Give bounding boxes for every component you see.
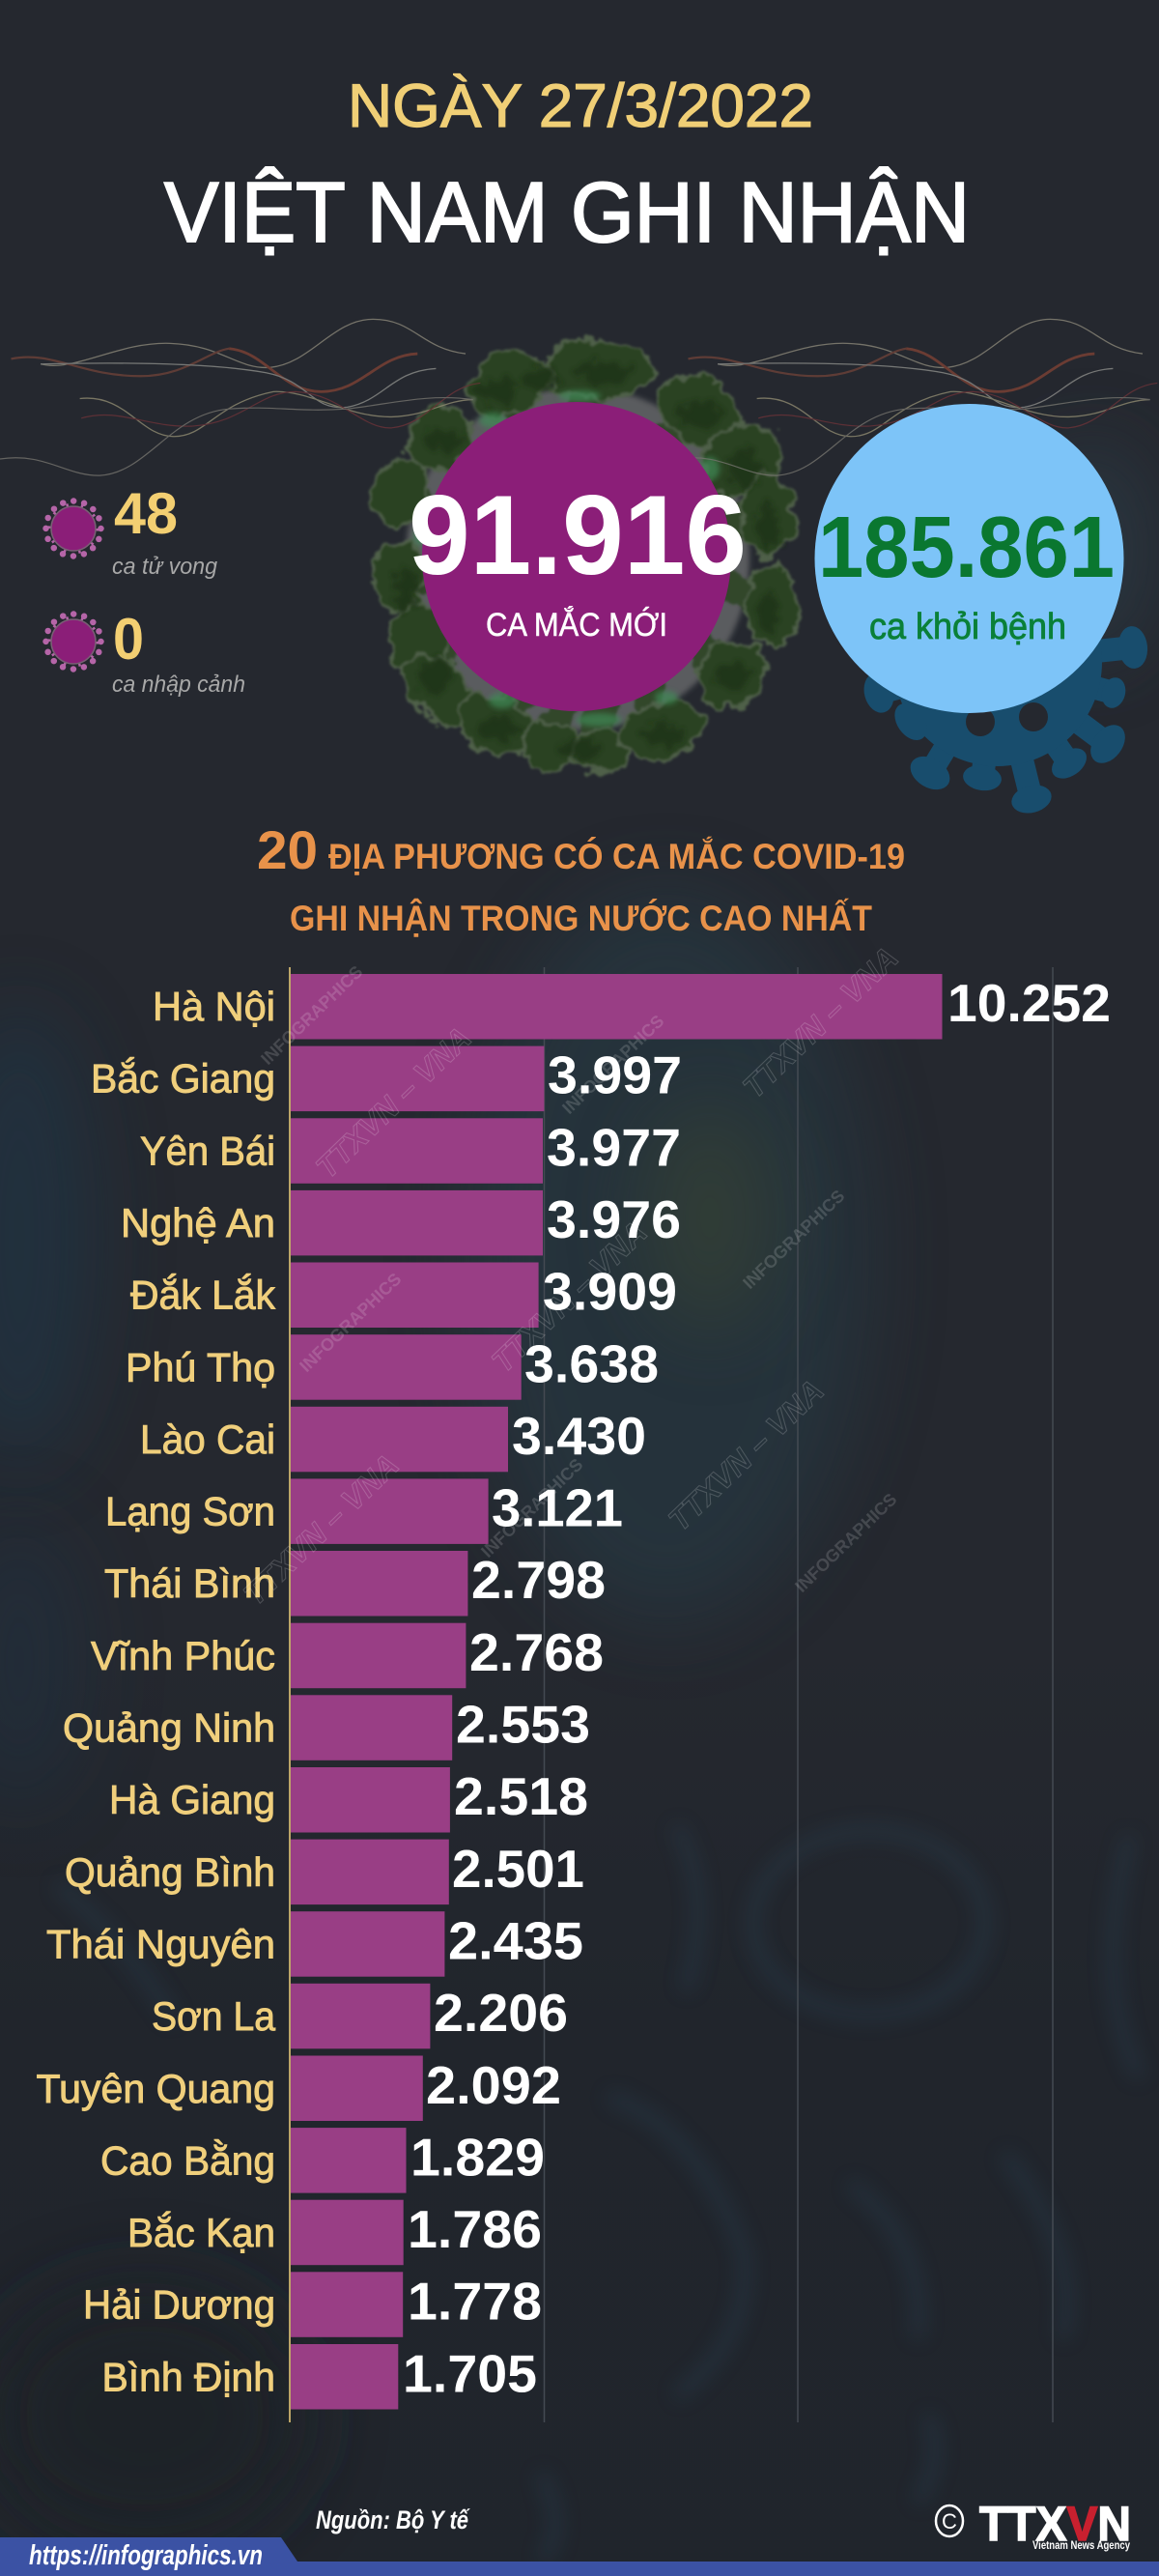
chart heading: [257, 819, 905, 938]
row: Bắc Kạn: 1.786: [408, 2199, 542, 2259]
icon: small virus: [46, 615, 100, 669]
row: Hải Dương: 1.778: [408, 2272, 542, 2332]
title: date: NGÀY 27/3/2022: [348, 72, 813, 140]
row: Lạng Sơn: 3.121: [492, 1478, 623, 1538]
row: Quảng Ninh: 2.553: [456, 1695, 590, 1755]
watermarks: TTXVN – VNA: [237, 1447, 406, 1612]
row: Yên Bái: Yên Bái: [140, 1128, 275, 1173]
row: Quảng Bình: 2.501: [452, 1839, 584, 1899]
row: Nghệ An: 3.976: [547, 1189, 681, 1249]
row: Lào Cai: Lào Cai: [140, 1417, 275, 1462]
watermarks: INFOGRAPHICS: [296, 1270, 405, 1376]
circle: new cases: 91.916: [409, 472, 747, 598]
chart heading: ĐỊA PHƯƠNG CÓ CA MẮC COVID-19: [328, 836, 905, 876]
decorative waves left: [0, 319, 480, 475]
row: Hải Dương: Hải Dương: [83, 2282, 275, 2328]
row: Thái Nguyên: 2.435: [448, 1911, 583, 1971]
row: Hà Nội: 10.252: [947, 973, 1111, 1033]
row: Nghệ An: [121, 1189, 681, 1255]
row: Bình Định: [102, 2343, 537, 2410]
watermarks: [237, 940, 905, 1612]
row: Phú Thọ: [126, 1333, 659, 1400]
row: Đắk Lắk: Đắk Lắk: [130, 1273, 276, 1318]
row: Cao Bằng: 1.829: [410, 2127, 545, 2187]
stat: imported cases: 0: [113, 607, 144, 672]
row: Tuyên Quang: [37, 2055, 561, 2121]
decorative waves right: [677, 319, 1157, 475]
row: Vĩnh Phúc: 2.768: [469, 1622, 604, 1682]
row: Quảng Ninh: [63, 1695, 590, 1760]
row: Lạng Sơn: Lạng Sơn: [105, 1489, 275, 1534]
icon: small virus: [46, 501, 100, 557]
row: Bắc Giang: Bắc Giang: [91, 1056, 275, 1102]
row: Yên Bái: 3.977: [547, 1117, 681, 1177]
row: Tuyên Quang: Tuyên Quang: [37, 2066, 275, 2111]
stat: deaths: 48: [114, 481, 178, 546]
row: Lào Cai: [140, 1406, 646, 1472]
watermarks: INFOGRAPHICS: [739, 1187, 848, 1293]
row: Phú Thọ: Phú Thọ: [126, 1344, 275, 1389]
row: Hà Giang: [109, 1766, 588, 1832]
row: Nghệ An: Nghệ An: [121, 1200, 275, 1245]
row: Bắc Kạn: Bắc Kạn: [127, 2210, 275, 2255]
row: Hải Dương: [83, 2272, 542, 2337]
watermarks: INFOGRAPHICS: [477, 1455, 586, 1561]
row: Thái Bình: Thái Bình: [104, 1560, 275, 1606]
stat: imported cases: [46, 607, 245, 698]
logo: TTXVN: Vietnam News Agency: [1032, 2538, 1130, 2552]
footer band: [0, 2537, 1159, 2576]
watermarks: TTXVN – VNA: [736, 940, 905, 1104]
watermarks: TTXVN – VNA: [309, 1020, 478, 1185]
row: Thái Bình: 2.798: [471, 1550, 606, 1610]
source: Nguồn: Bộ Y tế: [316, 2505, 470, 2534]
watermarks: INFOGRAPHICS: [257, 962, 366, 1069]
row: Vĩnh Phúc: [91, 1622, 604, 1688]
blue virus icon: [860, 558, 1149, 817]
row: Đắk Lắk: [130, 1262, 677, 1328]
row: Quảng Bình: Quảng Bình: [65, 1849, 275, 1895]
row: Bình Định: Bình Định: [102, 2354, 275, 2399]
row: Cao Bằng: [100, 2127, 545, 2193]
watermarks: TTXVN – VNA: [662, 1373, 831, 1537]
row: Thái Nguyên: Thái Nguyên: [46, 1921, 275, 1967]
row: Lào Cai: 3.430: [512, 1406, 646, 1466]
row: Thái Bình: [104, 1550, 606, 1616]
row: Bắc Giang: [91, 1045, 682, 1111]
row: Hà Giang: 2.518: [454, 1766, 588, 1826]
row: Quảng Bình: [65, 1839, 584, 1904]
row: Cao Bằng: Cao Bằng: [100, 2137, 275, 2183]
row: Hà Nội: [153, 973, 1111, 1040]
row: Bắc Giang: 3.997: [548, 1045, 682, 1105]
row: Sơn La: Sơn La: [152, 1993, 276, 2039]
row: Vĩnh Phúc: Vĩnh Phúc: [91, 1633, 275, 1678]
logo: TTXVN: TTXVN: [979, 2497, 1131, 2551]
row: Phú Thọ: 3.638: [524, 1333, 659, 1393]
watermarks: INFOGRAPHICS: [558, 1012, 667, 1118]
row: Bắc Kạn: [127, 2199, 542, 2265]
row: Sơn La: [152, 1983, 568, 2048]
footer band: https://infographics.vn: [29, 2540, 263, 2571]
row: Bình Định: 1.705: [403, 2343, 537, 2403]
logo: TTXVN: C: [942, 2509, 957, 2533]
title: main heading: VIỆT NAM GHI NHẬN: [164, 164, 970, 260]
watermarks: TTXVN – VNA: [485, 1215, 654, 1379]
row: Tuyên Quang: 2.092: [426, 2055, 561, 2115]
gridlines and axis: [290, 967, 1053, 2422]
row: Yên Bái: [140, 1117, 681, 1184]
row: Quảng Ninh: Quảng Ninh: [63, 1704, 275, 1751]
row: Thái Nguyên: [46, 1911, 583, 1977]
row: Sơn La: 2.206: [434, 1983, 568, 2043]
circle: new cases: [409, 402, 747, 711]
circle: new cases: CA MẮC MỚI: [486, 607, 667, 644]
row: Hà Nội: Hà Nội: [153, 984, 275, 1029]
watermarks: INFOGRAPHICS: [791, 1490, 900, 1596]
stat: imported cases: ca nhập cảnh: [112, 672, 245, 698]
row: Lạng Sơn: [105, 1478, 623, 1544]
row: Đắk Lắk: 3.909: [543, 1262, 677, 1322]
row: Hà Giang: Hà Giang: [109, 1777, 275, 1822]
bar chart: [37, 967, 1111, 2422]
circle: recovered: ca khỏi bệnh: [869, 607, 1066, 647]
stat: deaths: [46, 481, 218, 580]
chart heading: 20: [257, 819, 318, 880]
stat: deaths: ca tử vong: [112, 554, 218, 580]
circle: recovered: 185.861: [818, 500, 1115, 596]
circle: recovered: [815, 404, 1124, 713]
chart heading: GHI NHẬN TRONG NƯỚC CAO NHẤT: [290, 898, 872, 938]
green coronavirus illustration: [360, 340, 798, 773]
